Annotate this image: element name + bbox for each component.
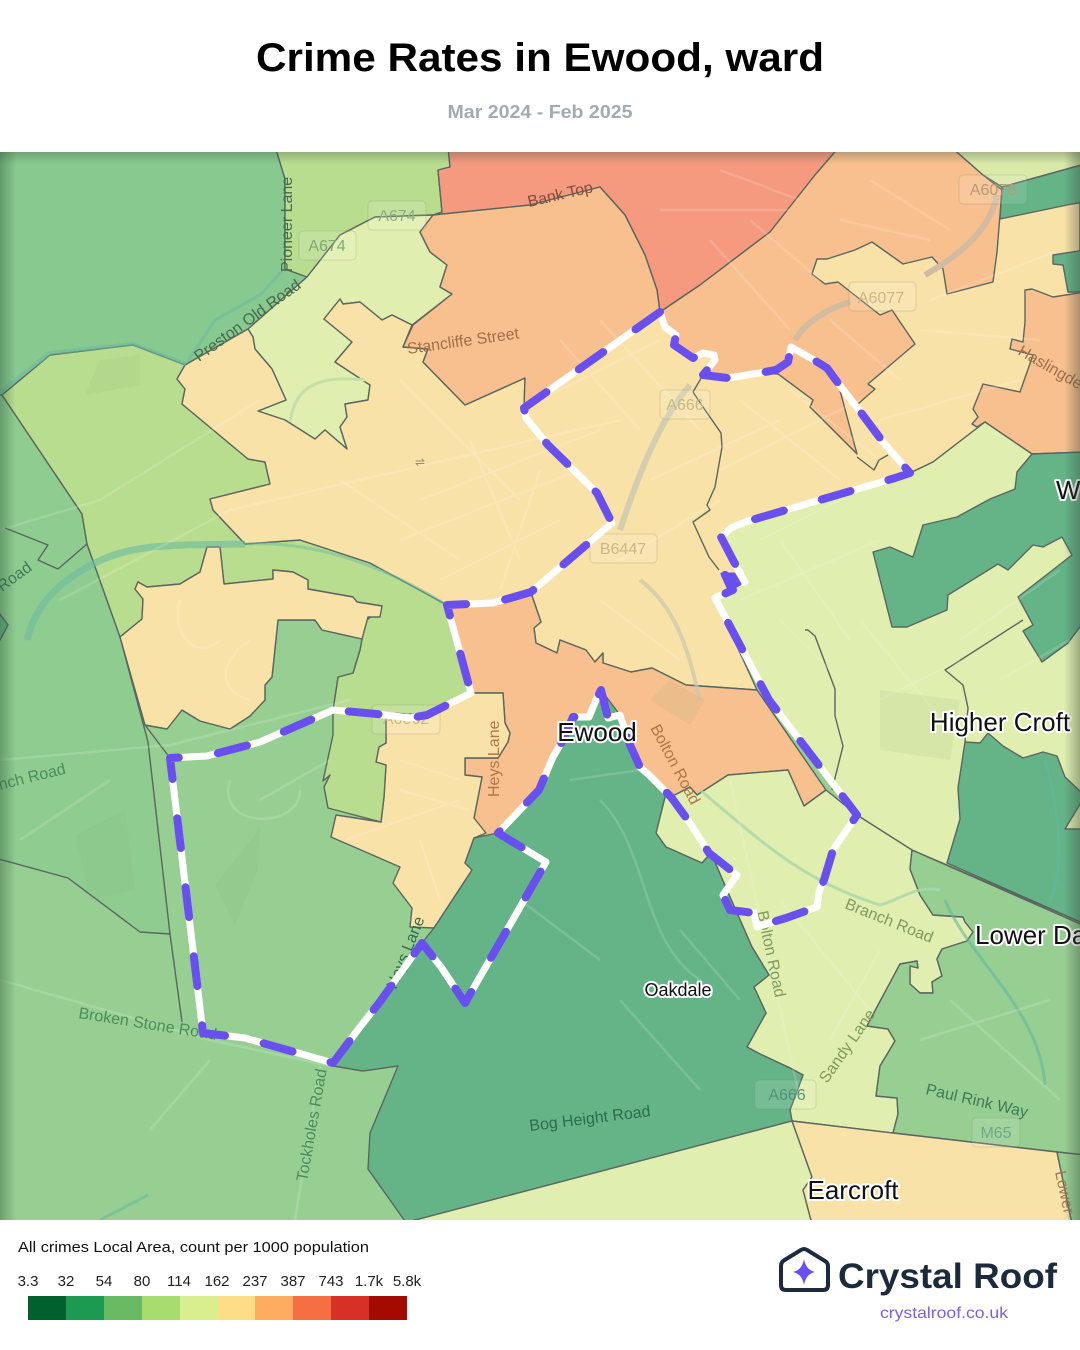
road numbers [308, 182, 1016, 1142]
place names: Higher Croft [930, 707, 1071, 737]
legend value labels: 387 [280, 1273, 306, 1290]
road numbers: A6078 [970, 182, 1016, 199]
website link: crystalroof.co.uk [880, 1305, 1009, 1322]
legend value labels: 54 [96, 1273, 112, 1290]
area: western strip green [0, 395, 170, 934]
road names: Heys Lane [384, 914, 428, 991]
area: north lime green [275, 146, 450, 277]
road names [0, 177, 1080, 1216]
road numbers: A666 [666, 397, 704, 414]
road numbers: B6447 [600, 541, 646, 558]
ward boundary white casing [170, 312, 910, 1063]
legend value labels: 32 [58, 1273, 74, 1290]
area: dark green Oakdale [333, 690, 803, 1224]
legend value labels: 80 [134, 1273, 150, 1290]
area: orange north-east [660, 146, 1002, 454]
area: pale green south edge [400, 1121, 812, 1224]
area: north-west moorland green [0, 146, 307, 395]
area: pale green top-right corner [956, 152, 1080, 188]
area: tan western neighbourhood [120, 547, 382, 729]
road numbers: A6062 [383, 711, 429, 728]
legend value labels [18, 1273, 422, 1290]
area: green strip by Lower Darwen [1057, 1152, 1080, 1224]
area: red Bank Top [433, 146, 840, 312]
logo wordmark: Crystal Roof [838, 1257, 1057, 1296]
road names: Preston Old Road [191, 277, 304, 365]
place names: Oakdale [644, 980, 712, 1000]
road numbers: A6077 [858, 290, 904, 307]
map edge shading [0, 152, 1080, 1220]
road numbers: M65 [980, 1125, 1012, 1142]
road names: Pioneer Lane [279, 177, 296, 272]
area: dark green Higher Croft south [947, 733, 1080, 924]
area: dark green right edge patch [1053, 250, 1080, 292]
logo icon: house with star [781, 1249, 828, 1290]
area: orange Stancliffe Street [403, 187, 660, 408]
river and railway lines [0, 195, 1059, 1220]
area: pale green Preston Old Road [248, 215, 452, 449]
legend value labels: 237 [242, 1273, 268, 1290]
road names: Bolton Road [753, 909, 788, 999]
road names: Tockholes Road [294, 1068, 331, 1183]
legend colour scale [28, 1296, 407, 1320]
place names: Earcroft [807, 1175, 899, 1205]
darker fields and land patches [650, 680, 960, 760]
road names: Stancliffe Street [406, 325, 521, 358]
ward boundary purple dashes [170, 312, 910, 1063]
area: dark green top-right [1000, 164, 1080, 219]
legend value labels: 743 [318, 1273, 344, 1290]
area: pale green south of ward [656, 770, 973, 1133]
road shield labels [299, 175, 1027, 1147]
area: pale green east of ward [715, 422, 1080, 924]
area: central tan ward [524, 312, 910, 690]
area: lime Heys Lane west [323, 710, 386, 822]
legend value labels: 1.7k [355, 1273, 384, 1290]
area: tan Earcroft [792, 1121, 1072, 1224]
title: Crime Rates in Ewood, ward [256, 36, 824, 80]
area: medium green pocket [145, 620, 362, 758]
road numbers: A674 [308, 238, 346, 255]
area: tan Heys Lane [331, 693, 510, 928]
area: dark patch west edge [0, 610, 8, 640]
area: medium green Paul Rink Way [867, 850, 1080, 1155]
road numbers: A666 [768, 1087, 806, 1104]
legend value labels: 5.8k [393, 1273, 422, 1290]
date range subtitle: Mar 2024 - Feb 2025 [448, 102, 632, 122]
choropleth map [0, 146, 1080, 1224]
road names: Bog Height Road [528, 1103, 651, 1135]
road names: Bolton Road [646, 722, 703, 808]
road numbers: A674 [378, 208, 416, 225]
area: west lime green [2, 345, 472, 715]
legend value labels: 3.3 [18, 1273, 38, 1290]
ward boundary purple blob at spur [722, 574, 740, 590]
legend value labels: 162 [204, 1273, 230, 1290]
road names: Bank Top [526, 179, 595, 211]
legend title: All crimes Local Area, count per 1000 population [18, 1239, 369, 1256]
place names: Ewood [557, 717, 637, 747]
road names: Branch Road [843, 896, 935, 947]
road names: Heys Lane [486, 720, 503, 797]
area: orange Haslingden Road [972, 289, 1080, 454]
area: tan north-east [812, 204, 1080, 471]
legend value labels: 114 [167, 1273, 191, 1290]
road names: Paul Rink Way [924, 1081, 1030, 1121]
road names: Lower [1051, 1169, 1077, 1216]
road names: Broken Stone Road [77, 1005, 218, 1044]
area: dark green north-east patch [873, 452, 1080, 662]
road names: Sandy Lane [816, 1006, 879, 1086]
area: tan central-west neighbourhood [177, 299, 612, 605]
area: orange southern ward [452, 596, 827, 836]
street network [0, 170, 1070, 1220]
railway station symbol: ⇌ [415, 455, 425, 469]
place names [557, 475, 1080, 1205]
boundary lines within areas [5, 375, 1023, 1022]
